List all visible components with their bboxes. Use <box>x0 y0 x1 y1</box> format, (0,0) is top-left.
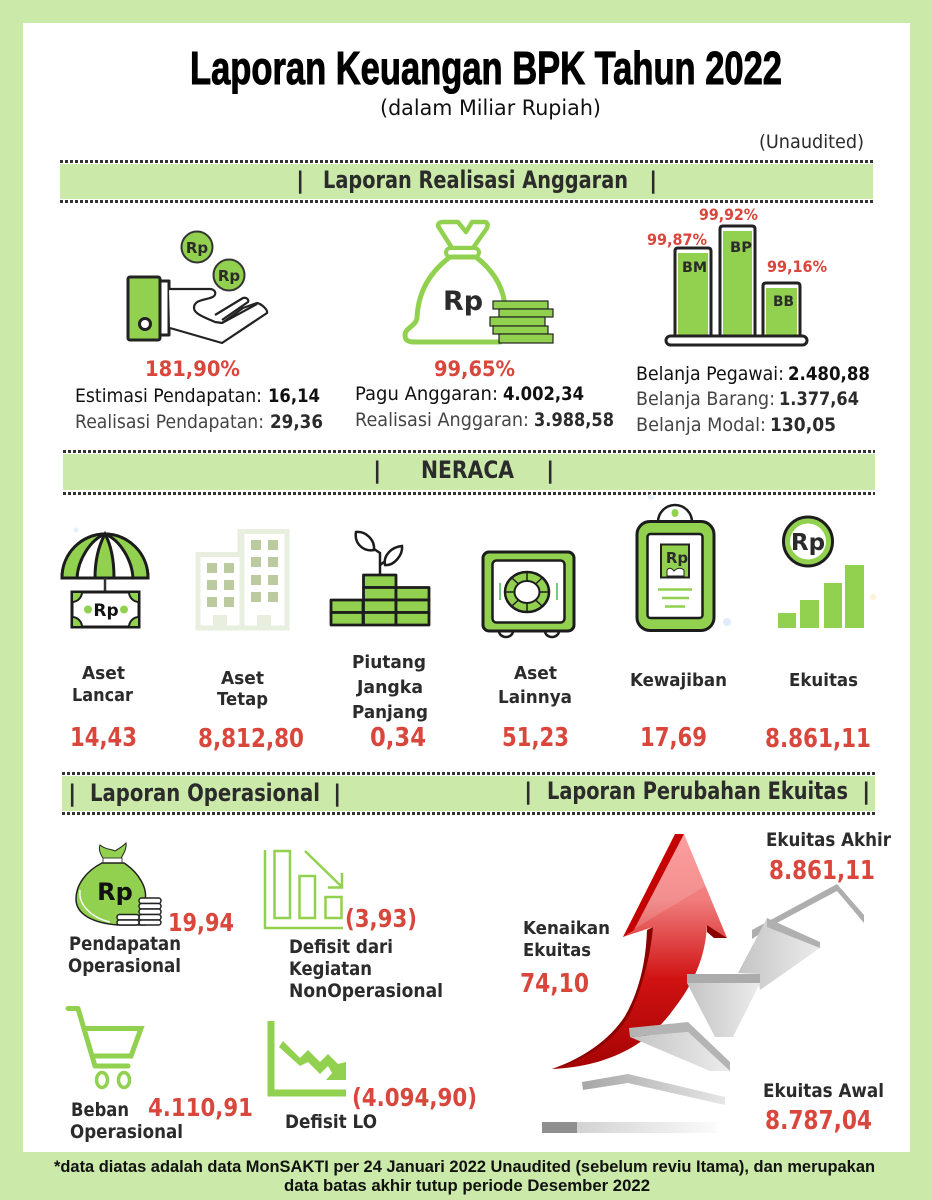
value: 8,812,80 <box>198 724 304 754</box>
belanja barang: 1.377,64 <box>779 388 859 410</box>
icon: safe <box>483 552 574 637</box>
footnote <box>54 1157 875 1195</box>
value: (4.094,90) <box>352 1083 477 1112</box>
label: Beban <box>71 1099 129 1121</box>
red upward arrow <box>552 834 727 1069</box>
percentage: 181,90% <box>145 357 240 381</box>
label: Panjang <box>352 702 428 723</box>
label: NonOperasional <box>289 980 443 1002</box>
unaudited note: (Unaudited) <box>759 131 864 153</box>
label <box>289 936 443 1002</box>
label <box>70 1099 183 1143</box>
icon: hand receiving coins <box>128 232 267 343</box>
percentage: 99,65% <box>434 357 515 381</box>
belanja pegawai: 2.480,88 <box>788 363 870 385</box>
realisasi anggaran: 3.988,58 <box>534 409 614 431</box>
value: (3,93) <box>345 904 417 933</box>
label: Tetap <box>217 689 268 710</box>
belanja modal: Belanja Modal: <box>636 414 766 436</box>
label: Lainnya <box>498 687 572 708</box>
ekuitas akhir <box>766 829 892 886</box>
section heading: Neraca: | <box>546 458 554 484</box>
panel: aset lancar <box>62 534 148 753</box>
value: 51,23 <box>502 723 569 753</box>
icon: umbrella over banknote: Rp <box>93 601 119 621</box>
section heading: Laporan Operasional and Laporan Perubahan Ekuitas: | <box>68 781 76 807</box>
icon: Rp coin and rising bars: Rp <box>791 530 825 556</box>
section heading: Neraca: | <box>373 458 381 484</box>
realisasi anggaran: Realisasi Anggaran: <box>355 409 529 431</box>
footnote: *data diatas adalah data MonSAKTI per 24 Januari 2022 Unaudited (sebelum reviu Itama), dan merupakan <box>54 1157 875 1176</box>
section heading: Laporan Operasional and Laporan Perubahan Ekuitas: | <box>524 779 532 805</box>
bar chart: realisasi belanja: BM <box>682 260 707 276</box>
pagu anggaran <box>355 383 584 405</box>
label: Operasional <box>70 1121 183 1143</box>
label <box>72 663 133 706</box>
icon: declining bar chart <box>265 850 343 928</box>
ekuitas awal: Ekuitas Awal <box>763 1080 884 1102</box>
label: Defisit LO <box>285 1111 377 1133</box>
panel: piutang jangka panjang <box>331 532 429 753</box>
label: Ekuitas <box>789 670 858 691</box>
icon: money bag with coins <box>405 222 553 343</box>
section heading: Laporan Operasional and Laporan Perubahan Ekuitas: | <box>862 779 870 805</box>
panel: perubahan ekuitas <box>520 829 892 1136</box>
icon: hand receiving coins: Rp <box>186 239 208 257</box>
panel: pendapatan <box>75 232 323 433</box>
section heading: Laporan Realisasi Anggaran: | <box>649 168 657 194</box>
subtitle: (dalam Miliar Rupiah) <box>380 96 601 120</box>
kenaikan ekuitas: Kenaikan <box>523 918 610 939</box>
panel: kewajiban <box>630 505 727 753</box>
gray staircase graphic <box>542 884 864 1133</box>
icon: money bag with coins: Rp <box>443 286 483 317</box>
kenaikan ekuitas: 74,10 <box>520 969 589 999</box>
bar chart: realisasi belanja: 99,16% <box>767 257 827 276</box>
value: 19,94 <box>168 908 234 937</box>
realisasi pendapatan: 29,36 <box>270 411 323 433</box>
icon: clipboard with Rp card <box>637 505 714 630</box>
estimasi pendapatan: 16,14 <box>268 385 320 407</box>
section heading: Laporan Realisasi Anggaran <box>60 162 873 202</box>
section heading: Laporan Operasional and Laporan Perubahan Ekuitas: | <box>333 781 341 807</box>
bar chart: realisasi belanja: 99,87% <box>647 230 707 249</box>
bar chart: realisasi belanja <box>647 205 827 345</box>
label <box>498 663 572 708</box>
panel: defisit LO <box>271 1021 477 1133</box>
footnote: data batas akhir tutup periode Desember 2022 <box>284 1176 650 1195</box>
panel: ekuitas <box>765 517 871 754</box>
bar chart: realisasi belanja: 99,92% <box>699 205 758 224</box>
ekuitas akhir: Ekuitas Akhir <box>766 829 892 851</box>
label: Pendapatan <box>69 933 181 955</box>
belanja pegawai <box>636 363 870 385</box>
panel: pendapatan operasional <box>68 843 234 977</box>
belanja barang: Belanja Barang: <box>636 388 775 410</box>
label: Kegiatan <box>289 958 372 980</box>
estimasi pendapatan: Estimasi Pendapatan: <box>75 385 262 407</box>
icon: clipboard with Rp card: Rp <box>666 549 688 567</box>
realisasi pendapatan: Realisasi Pendapatan: <box>75 411 264 433</box>
panel: aset lainnya <box>483 552 574 753</box>
ekuitas akhir: 8.861,11 <box>769 856 875 886</box>
section heading: Neraca: NERACA <box>421 456 514 484</box>
icon: office buildings <box>198 531 287 630</box>
bar chart: realisasi belanja: BP <box>730 240 752 256</box>
panel: beban operasional <box>68 1008 253 1143</box>
section heading: Laporan Realisasi Anggaran: | <box>296 168 304 194</box>
icon: falling line chart <box>271 1021 346 1093</box>
section heading: Laporan Operasional and Laporan Perubahan Ekuitas: Laporan Perubahan Ekuitas <box>547 777 848 805</box>
panel: aset tetap <box>198 531 304 754</box>
label: Operasional <box>68 955 181 977</box>
label: Kewajiban <box>630 670 727 691</box>
panel: belanja <box>636 205 870 436</box>
panel: defisit kegiatan non operasional <box>265 850 443 1002</box>
icon: shopping cart <box>68 1008 141 1088</box>
label: Piutang <box>352 652 426 673</box>
value: 0,34 <box>370 723 426 753</box>
belanja barang <box>636 388 859 410</box>
belanja modal: 130,05 <box>770 414 836 436</box>
value: 17,69 <box>640 723 707 753</box>
section heading: Laporan Operasional and Laporan Perubahan Ekuitas <box>62 774 875 814</box>
label <box>68 933 181 977</box>
section heading: Laporan Operasional and Laporan Perubahan Ekuitas: Laporan Operasional <box>90 779 320 807</box>
label: Aset <box>221 668 264 689</box>
value: 14,43 <box>70 723 137 753</box>
icon: green money bag: Rp <box>97 878 133 906</box>
pagu anggaran: Pagu Anggaran: <box>355 383 498 405</box>
label: Aset <box>514 663 557 684</box>
bar chart: realisasi belanja: BB <box>773 294 794 310</box>
label <box>352 652 428 723</box>
icon: umbrella over banknote <box>62 534 148 627</box>
label: Jangka <box>355 677 423 698</box>
value: 4.110,91 <box>148 1093 253 1122</box>
label: Aset <box>82 663 125 684</box>
value: 8.861,11 <box>765 724 871 754</box>
ekuitas awal <box>763 1080 884 1136</box>
kenaikan ekuitas: Ekuitas <box>523 940 591 961</box>
label: Defisit dari <box>289 936 393 958</box>
label: Lancar <box>72 685 133 706</box>
kenaikan ekuitas <box>520 918 610 999</box>
belanja pegawai: Belanja Pegawai: <box>636 363 784 385</box>
label <box>217 668 268 710</box>
icon: hand receiving coins: Rp <box>218 267 240 285</box>
icon: Rp coin and rising bars <box>778 517 864 628</box>
icon: green money bag <box>76 843 161 925</box>
section heading: Neraca <box>63 452 875 494</box>
section heading: Laporan Realisasi Anggaran: Laporan Realisasi Anggaran <box>323 166 628 194</box>
ekuitas awal: 8.787,04 <box>765 1106 872 1136</box>
pagu anggaran: 4.002,34 <box>503 383 584 405</box>
icon: coin stacks with sprout <box>331 532 429 625</box>
panel: anggaran <box>355 222 614 431</box>
